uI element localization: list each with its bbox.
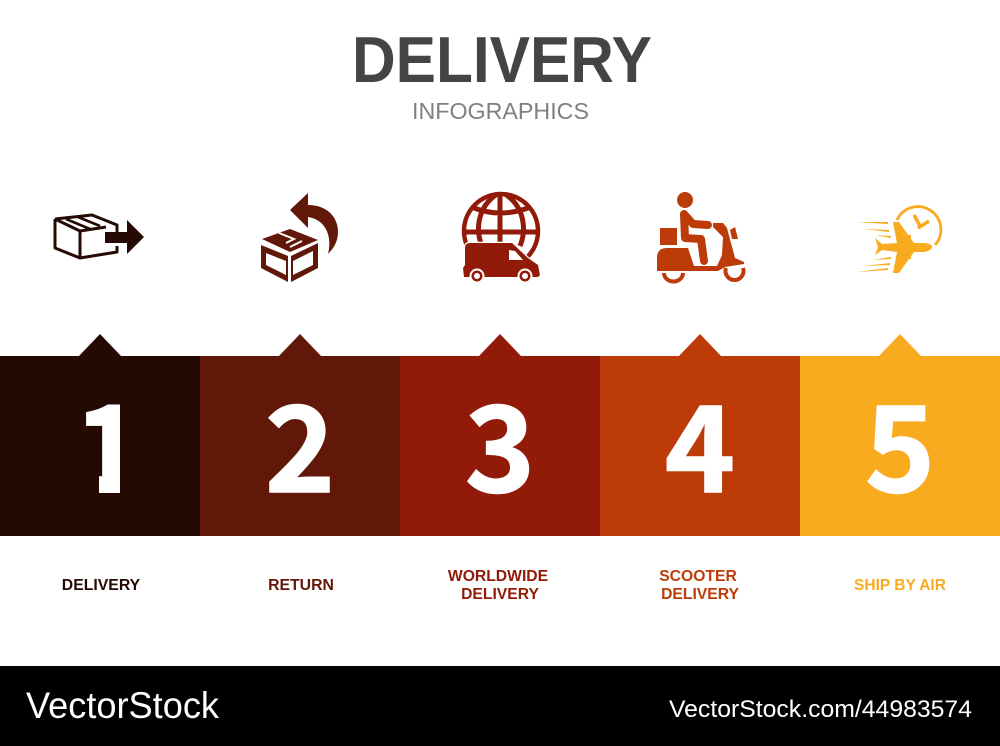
panel: step 2: 2 (265, 355, 335, 527)
label: return: RETURN (268, 577, 334, 594)
subtitle: INFOGRAPHICS (412, 98, 589, 124)
panel: step 3: 3 (465, 355, 535, 527)
label: ship by air: SHIP BY AIR (854, 577, 946, 594)
label: worldwide delivery: WORLDWIDE (448, 568, 548, 585)
label: scooter delivery (659, 568, 739, 603)
footer bar (0, 666, 1000, 746)
icon: box with return arrow (261, 193, 338, 282)
footer logo: VectorStock (26, 685, 219, 726)
label: delivery: DELIVERY (62, 577, 141, 594)
panel: step 1 (0, 334, 200, 536)
panel: step 4: 4 (665, 355, 735, 527)
icon: scooter rider (657, 192, 744, 282)
label: scooter delivery: SCOOTER (659, 568, 737, 585)
panel: step 4 (600, 334, 800, 536)
icon: plane with clock (856, 207, 941, 273)
icon: box with arrow (55, 215, 144, 258)
label: scooter delivery: DELIVERY (661, 586, 739, 603)
icon: globe with van (463, 194, 540, 284)
panel: step 2 (200, 334, 400, 536)
title: DELIVERY (352, 23, 652, 96)
label: worldwide delivery (448, 568, 548, 603)
panel: step 1: 1 (75, 355, 145, 527)
footer url: VectorStock.com/44983574 (669, 696, 972, 723)
label: worldwide delivery: DELIVERY (461, 586, 539, 603)
panel: step 3 (400, 334, 600, 536)
panel: step 5 (800, 334, 1000, 536)
panel: step 5: 5 (865, 355, 935, 527)
